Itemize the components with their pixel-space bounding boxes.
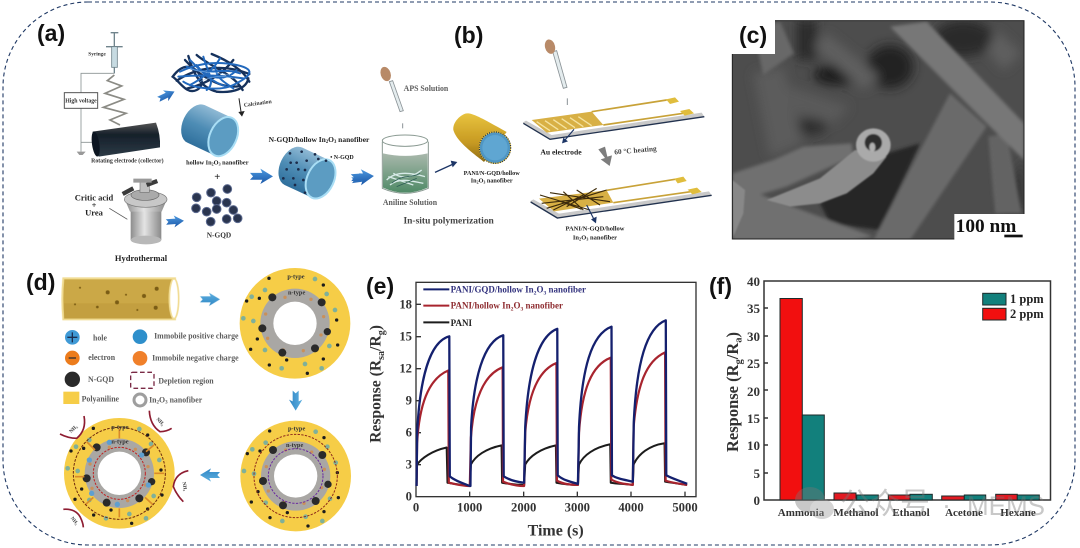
legend: charges and materials: N-GQD bbox=[88, 375, 114, 384]
y tick labels: 3 bbox=[406, 458, 412, 472]
label: hollow In2O3 nanofiber: nanofiber bbox=[221, 159, 249, 166]
y axis title: ) bbox=[368, 325, 385, 330]
cross-section: in air: p-type bbox=[287, 273, 305, 280]
x tick labels: 4000 bbox=[618, 501, 644, 515]
chart legend: PANI bbox=[451, 318, 472, 328]
panel b: in-situ polymerization and sensor fabrication bbox=[350, 38, 712, 241]
label: PANI/N-GQD/hollow In2O3 nanofiber on sensor: O bbox=[581, 234, 586, 241]
y axis title: /R bbox=[368, 335, 385, 352]
icon: PANI coated nanofiber bbox=[453, 113, 511, 163]
y tick labels: 15 bbox=[399, 330, 412, 344]
x category labels: Acetone bbox=[945, 507, 983, 519]
y tick labels: 9 bbox=[406, 394, 412, 408]
arrow: to N-GQD/hollow fiber bbox=[250, 169, 273, 184]
arrow: hydrothermal to N-GQD bbox=[166, 215, 184, 228]
y tick labels: 0 bbox=[406, 490, 412, 504]
label: 60 C heating: 60 °C heating bbox=[614, 144, 657, 157]
label: APS solution: APS Solution bbox=[404, 84, 449, 93]
chart legend: nanofiber bbox=[523, 301, 563, 311]
scale bar: 100 nm bbox=[956, 216, 1016, 237]
label: critic acid + urea: + bbox=[92, 200, 97, 210]
y axis title: Response (R bbox=[723, 364, 742, 452]
arrow: calcination bbox=[238, 98, 273, 117]
label: hydrothermal: Hydrothermal bbox=[115, 253, 168, 263]
arrow: electrospinning to mesh bbox=[156, 86, 177, 105]
y axis title: Response (R bbox=[368, 360, 385, 443]
label: PANI/N-GQD/hollow In2O3 nanofiber on sensor: nanofiber bbox=[588, 234, 617, 241]
SEM border bbox=[732, 21, 1024, 239]
chart legend: nanofiber bbox=[546, 285, 586, 295]
watermark: MEMS bbox=[967, 491, 1045, 521]
panel c: SEM micrograph bbox=[730, 18, 1026, 241]
icon: sensor with deposited nanofibers bbox=[530, 177, 712, 218]
legend: charges and materials: O bbox=[159, 395, 165, 404]
cross-section: in air: n-type bbox=[288, 289, 305, 296]
arrow: nanofiber pointer bbox=[587, 205, 597, 223]
x tick labels: 0 bbox=[413, 501, 419, 515]
label: critic acid + urea: Urea bbox=[85, 208, 104, 218]
legend: charges and materials: electron bbox=[88, 353, 116, 362]
panel d: sensing mechanism schematic bbox=[60, 268, 351, 531]
panel e: response line chart bbox=[368, 282, 698, 539]
icon: nanofiber cylinder bbox=[62, 278, 179, 319]
chart legend bbox=[423, 285, 586, 328]
x tick labels: 1000 bbox=[457, 501, 482, 515]
label: critic acid + urea: Critic acid bbox=[75, 193, 113, 203]
arrow: precursor into autoclave bbox=[109, 208, 127, 219]
cross-section: NH3 exposure: n-type bbox=[111, 439, 129, 446]
cross-section: NH3 exposure: p-type bbox=[111, 424, 129, 431]
label: in-situ polymerization: In-situ polymerization bbox=[403, 217, 495, 227]
y tick labels: 0 bbox=[754, 493, 760, 508]
label: hollow In2O3 nanofiber: hollow In bbox=[186, 159, 212, 166]
icon: electrospinning setup: Rotating electrode (collector) bbox=[91, 158, 164, 165]
label: hollow In2O3 nanofiber: 2 bbox=[212, 161, 214, 166]
watermark bbox=[795, 487, 1045, 521]
legend: charges and materials: Immobile positive charge bbox=[154, 331, 239, 340]
icon: hydrothermal autoclave bbox=[123, 181, 167, 244]
legend: charges and materials: Immobile negative charge bbox=[152, 354, 239, 363]
panel label d: (d) bbox=[26, 269, 55, 295]
chart legend: 2 bbox=[534, 291, 537, 297]
watermark: · bbox=[942, 490, 951, 520]
y axis title: g bbox=[376, 330, 387, 335]
arrow: to polymerization bbox=[351, 171, 371, 187]
label: N-GQD: N-GQD bbox=[207, 230, 231, 239]
chart legend: PANI/hollow In bbox=[451, 301, 511, 311]
label: PANI/N-GQD/hollow In2O3 nanofiber: In bbox=[471, 179, 477, 185]
label: PANI/N-GQD/hollow In2O3 nanofiber on sensor: PANI/N-GQD/hollow bbox=[566, 226, 625, 233]
scale bar bbox=[954, 214, 1026, 241]
chart axes bbox=[764, 281, 1050, 500]
x category labels bbox=[778, 507, 1036, 519]
cross-section: depletion regions: p-type bbox=[288, 425, 305, 432]
panel a: fabrication of N-GQD/hollow In2O3 nanofiber bbox=[64, 33, 371, 263]
y axis title: /R bbox=[723, 342, 742, 360]
y tick labels: 35 bbox=[747, 301, 760, 316]
icon: electrospinning setup: High voltage bbox=[65, 99, 97, 105]
y tick labels: 30 bbox=[747, 329, 760, 344]
arrow: Au electrode pointer bbox=[562, 129, 574, 143]
chart axes bbox=[416, 282, 696, 497]
label: PANI/N-GQD/hollow In2O3 nanofiber: nanofiber bbox=[485, 179, 513, 185]
legend: charges and materials bbox=[63, 329, 239, 406]
label: PANI/N-GQD/hollow In2O3 nanofiber: PANI/N-GQD/hollow bbox=[464, 171, 520, 177]
legend: charges and materials: Depletion region bbox=[158, 377, 214, 386]
arrow: cylinder to cross-section bbox=[200, 293, 220, 306]
y tick labels: 12 bbox=[399, 362, 412, 376]
label: plus: + bbox=[214, 172, 220, 183]
arrow: depletion to ammonia exposure bbox=[200, 468, 220, 482]
line series: PANI, PANI/hollow, PANI/GQD/hollow bbox=[417, 320, 687, 486]
watermark: 公众号 bbox=[840, 488, 930, 521]
y tick labels: 18 bbox=[399, 297, 412, 311]
icon: NH3 molecules approaching: NH₃ bbox=[181, 482, 187, 492]
chart legend: 3 bbox=[543, 291, 546, 297]
icon: NH3 molecules approaching bbox=[60, 411, 188, 527]
icon: hollow In2O3 nanofiber bbox=[175, 100, 244, 161]
legend: charges and materials: In bbox=[149, 395, 157, 404]
label: N-GQD/hollow In2O3 nanofiber: 3 bbox=[334, 140, 337, 145]
icon: NH3 molecules approaching: NH₃ bbox=[155, 417, 165, 428]
panel label f: (f) bbox=[709, 273, 732, 299]
label cover bbox=[730, 18, 775, 54]
y axis title: sa bbox=[376, 351, 387, 360]
label: PANI/N-GQD/hollow In2O3 nanofiber: O bbox=[479, 179, 484, 185]
icon: N-GQD decorated hollow fiber: • N-GQD bbox=[330, 155, 354, 161]
x category labels: Methanol bbox=[833, 507, 879, 519]
legend: charges and materials: Polyaniline bbox=[82, 394, 120, 403]
panel label e: (e) bbox=[366, 273, 394, 299]
label: PANI/N-GQD/hollow In2O3 nanofiber on sensor: 3 bbox=[586, 236, 589, 241]
y tick labels: 5 bbox=[754, 466, 760, 481]
y tick labels bbox=[747, 274, 760, 508]
y axis title: ) bbox=[723, 332, 742, 337]
y tick labels bbox=[399, 297, 412, 504]
arrow: calcination: Calcination bbox=[244, 99, 273, 109]
legend: charges and materials: 3 bbox=[165, 400, 168, 405]
panel label a: (a) bbox=[37, 20, 65, 46]
icon: second dropper bbox=[543, 38, 567, 105]
y axis title: a bbox=[734, 337, 744, 343]
label: N-GQD/hollow In2O3 nanofiber: nanofiber bbox=[336, 135, 370, 144]
icon: NH3 molecules approaching: NH₃ bbox=[69, 516, 79, 527]
panel f: selectivity bar chart bbox=[723, 274, 1050, 521]
y tick labels: 15 bbox=[747, 411, 760, 426]
label: N-GQD/hollow In2O3 nanofiber: 2 bbox=[326, 140, 329, 145]
icon: APS dropper bbox=[379, 65, 403, 128]
cross-section: in air bbox=[240, 268, 350, 379]
chart legend bbox=[983, 292, 1044, 321]
arrow: to PANI coated fiber bbox=[435, 161, 457, 172]
cross-section: depletion regions: n-type bbox=[286, 442, 303, 449]
label: PANI/N-GQD/hollow In2O3 nanofiber: 2 bbox=[477, 180, 479, 185]
x tick labels: 2000 bbox=[511, 501, 536, 515]
y tick labels: 40 bbox=[747, 274, 760, 289]
y tick labels: 10 bbox=[747, 438, 760, 453]
label: PANI/N-GQD/hollow In2O3 nanofiber: 3 bbox=[483, 180, 485, 185]
cross-section: NH3 exposure bbox=[64, 418, 175, 529]
icon: nanofiber mesh bbox=[173, 54, 249, 92]
SEM image bbox=[732, 20, 1024, 240]
legend: charges and materials: hole bbox=[93, 334, 107, 343]
label: N-GQD/hollow In2O3 nanofiber: O bbox=[328, 135, 334, 144]
label: hollow In2O3 nanofiber: O bbox=[214, 159, 219, 166]
panel label b: (b) bbox=[454, 22, 483, 48]
legend: charges and materials: 2 bbox=[157, 400, 160, 405]
label: hollow In2O3 nanofiber: 3 bbox=[219, 161, 221, 166]
arrow: air to depletion bbox=[289, 391, 302, 411]
label: PANI/N-GQD/hollow In2O3 nanofiber on sensor: 2 bbox=[579, 236, 581, 241]
label: aniline solution: Aniline Solution bbox=[383, 198, 438, 207]
icon: N-GQD dots bbox=[192, 185, 242, 226]
x tick labels: 3000 bbox=[565, 501, 590, 515]
x tick labels bbox=[413, 501, 698, 515]
y axis title: g bbox=[734, 358, 744, 364]
chart legend: 3 bbox=[520, 307, 523, 313]
arrow: heating step bbox=[598, 147, 612, 166]
panel label c: (c) bbox=[739, 22, 767, 48]
label: PANI/N-GQD/hollow In2O3 nanofiber on sensor: In bbox=[573, 234, 579, 241]
arrow: into beaker bbox=[350, 168, 374, 185]
icon: Au electrode on substrate bbox=[523, 97, 704, 139]
y tick labels: 6 bbox=[406, 426, 412, 440]
x category labels: Ethanol bbox=[892, 507, 930, 519]
label: Au electrode: Au electrode bbox=[540, 148, 582, 157]
x category labels: Ammonia bbox=[778, 507, 825, 519]
chart legend: O bbox=[536, 285, 543, 295]
cross-section: depletion regions bbox=[240, 421, 351, 531]
icon: NH3 molecules approaching: NH₃ bbox=[69, 424, 79, 435]
y tick labels: 20 bbox=[747, 384, 760, 399]
icon: beaker with aniline solution bbox=[382, 135, 428, 193]
chart legend: 1 ppm bbox=[1010, 292, 1044, 306]
x tick labels: 5000 bbox=[672, 501, 698, 515]
x axis title: Time (s) bbox=[528, 522, 584, 539]
icon: electrospinning setup: Syringe bbox=[88, 51, 106, 57]
label: N-GQD/hollow In2O3 nanofiber: N-GQD/hollow In bbox=[269, 135, 326, 144]
y tick labels: 25 bbox=[747, 356, 760, 371]
bars bbox=[780, 298, 1039, 500]
x category labels: Hexane bbox=[1000, 507, 1036, 519]
chart legend: O bbox=[513, 301, 520, 311]
chart legend: 2 ppm bbox=[1010, 307, 1044, 321]
icon: N-GQD decorated hollow fiber bbox=[273, 142, 354, 203]
chart legend: 2 bbox=[511, 307, 514, 313]
legend: charges and materials: nanofiber bbox=[168, 395, 203, 404]
chart legend: PANI/GQD/hollow In bbox=[451, 285, 534, 295]
icon: electrospinning setup bbox=[64, 33, 164, 165]
